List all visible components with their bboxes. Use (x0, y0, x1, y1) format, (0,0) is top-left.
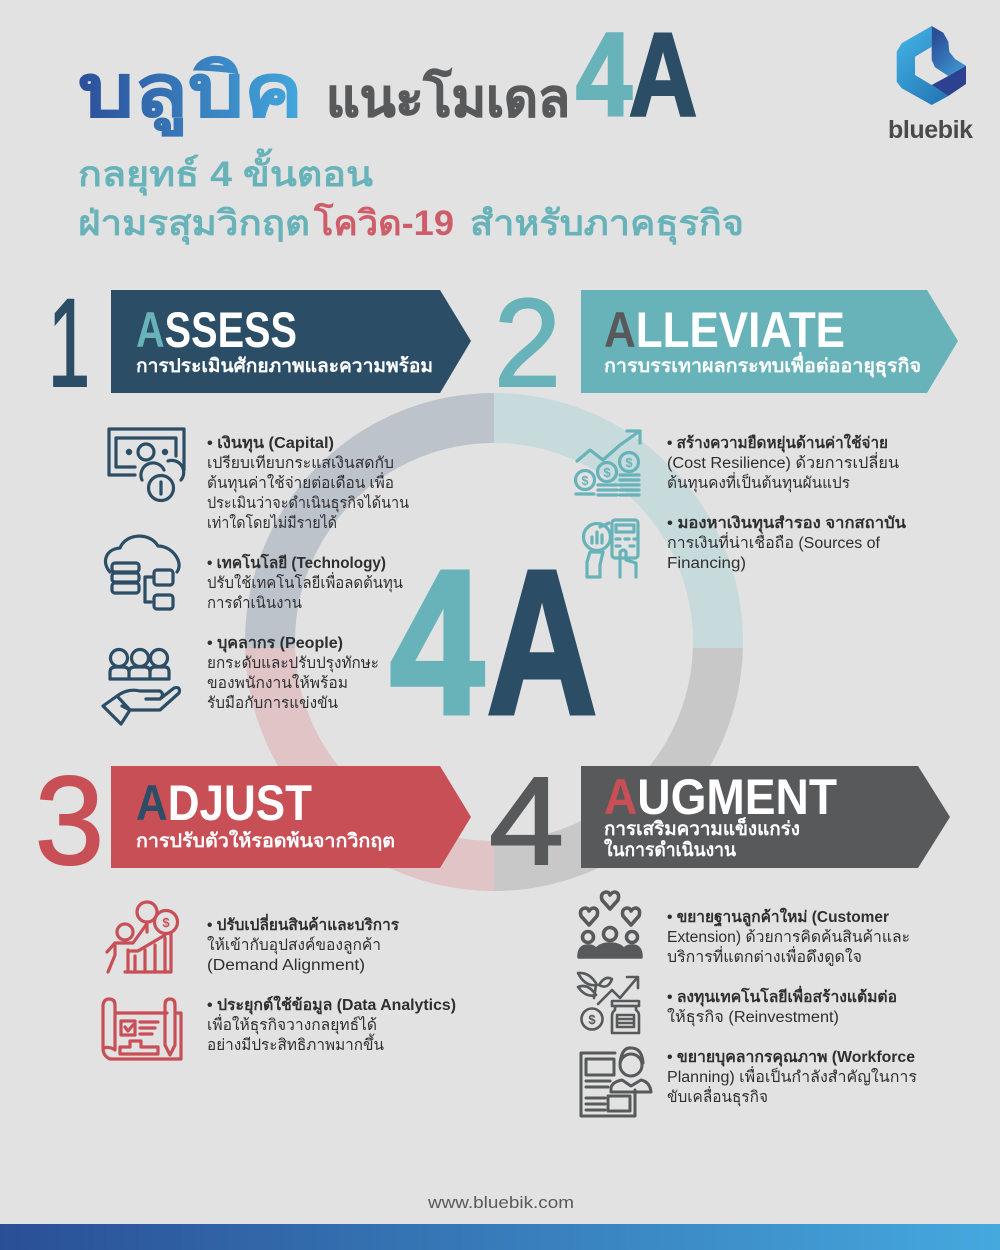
icon: plant, arrow, coin and jar (578, 973, 639, 1033)
icon: hearts and people (579, 892, 641, 957)
number 2: 2 (494, 274, 561, 413)
banner: assess (111, 290, 471, 393)
icon: cloud and servers (105, 536, 179, 609)
text: reinvestment: ให้ธุรกิจ (Reinvestment) (667, 1008, 839, 1027)
subtitle line 2 (78, 202, 744, 245)
banner: assess: การประเมินศักยภาพและความพร้อม (136, 355, 433, 377)
text: capital: ประเมินว่าจะดำเนินธุรกิจได้นาน (207, 494, 409, 513)
banner: augment: การเสริมความแข็งแกร่ง (604, 816, 800, 840)
title: suggests model: แนะโมเดล (326, 67, 570, 128)
icon: coins and growth arrow (576, 431, 640, 495)
icon: person with chart (107, 902, 178, 972)
text: workforce planning: • ขยายบุคลากรคุณภาพ (Workforce (667, 1049, 915, 1067)
subtitle line 2: สำหรับภาคธุรกิจ (470, 204, 744, 245)
panel: step 2 alleviate (494, 274, 958, 577)
icon: target and calculator (584, 520, 638, 577)
text: data analytics: • ประยุกต์ใช้ข้อมูล (Data Analytics) (207, 995, 456, 1016)
text: people: รับมือกับการแข่งขัน (207, 694, 338, 712)
text: sources of financing: การเงินที่น่าเชื่อถือ (Sources of (667, 532, 881, 552)
number 1: 1 (48, 274, 90, 413)
text: people: ยกระดับและปรับปรุงทักษะ (207, 655, 379, 673)
logo: bluebik: bluebik (888, 116, 973, 144)
center 4A: A (487, 528, 597, 757)
text: data analytics: อย่างมีประสิทธิภาพมากขึ้น (207, 1033, 384, 1054)
banner: augment: ในการดำเนินงาน (604, 838, 736, 861)
text: customer extension: Extension) ด้วยการคิดค้นสินค้าและ (667, 929, 910, 946)
text: demand alignment (207, 913, 400, 974)
subtitle line 2: ฝ่ามรสุมวิกฤต (78, 204, 310, 245)
text: capital: เปรียบเทียบกระแสเงินสดกับ (207, 455, 394, 472)
text: data analytics: เพื่อให้ธุรกิจวางกลยุทธ์ได้ (207, 1014, 377, 1035)
text: capital (207, 434, 409, 532)
text: cost resilience: (Cost Resilience) ด้วยการเปลี่ยน (667, 452, 899, 472)
text: people: • บุคลากร (People) (207, 635, 343, 653)
icon: people on hand (103, 650, 179, 724)
title: 4A: 4 (576, 9, 632, 141)
footer url: www.bluebik.com (427, 1193, 574, 1212)
text: capital: เท่าใดโดยไม่มีรายได้ (207, 514, 337, 532)
text: technology: การดำเนินงาน (207, 595, 302, 612)
icon: plant, arrow, coin and jar: $ (588, 1012, 596, 1027)
text: sources of financing: • มองหาเงินทุนสำรอง จากสถาบัน (667, 514, 906, 533)
text: reinvestment (667, 985, 897, 1027)
center 4A (390, 528, 597, 757)
center 4A: 4 (390, 528, 484, 757)
text: workforce planning: ขับเคลื่อนธุรกิจ (667, 1086, 768, 1107)
banner: adjust: ADJUST (136, 775, 312, 831)
text: customer extension (667, 907, 910, 967)
text: capital: ต้นทุนค่าใช้จ่ายต่อเดือน เพื่อ (207, 472, 394, 493)
text: sources of financing (667, 514, 906, 572)
number 4: 4 (489, 752, 564, 891)
text: people (207, 635, 379, 712)
subtitle line 1: กลยุทธ์ 4 ขั้นตอน (78, 148, 373, 196)
logo: bluebik (888, 26, 973, 144)
text: customer extension: บริการที่แตกต่างเพื่อดึงดูดใจ (667, 946, 862, 967)
text: data analytics (207, 995, 456, 1054)
panel: step 4 augment (489, 752, 950, 1116)
text: cost resilience: ต้นทุนคงที่เป็นต้นทุนผันแปร (667, 472, 850, 493)
text: capital: • เงินทุน (Capital) (207, 434, 334, 453)
banner: assess: ASSESS (136, 302, 297, 358)
banner: augment: AUGMENT (604, 769, 837, 825)
text: workforce planning (667, 1049, 917, 1107)
banner: augment (581, 766, 950, 868)
panel: step 1 assess (48, 274, 471, 724)
icon: document and person (581, 1048, 651, 1116)
text: cost resilience: • สร้างความยืดหยุ่นด้านค่าใช้จ่าย (667, 433, 888, 453)
ring chart behind the 4A (270, 418, 718, 866)
icon: coins and growth arrow: $ (581, 473, 589, 488)
icon: money and coins (109, 429, 184, 500)
banner: adjust (111, 766, 471, 868)
footer gradient bar (0, 1224, 1000, 1250)
text: people: ของพนักงานให้พร้อม (207, 674, 348, 692)
text: technology: • เทคโนโลยี (Technology) (207, 553, 386, 572)
subtitle line 2: โควิด-19 (313, 202, 454, 243)
panel: step 3 adjust (35, 752, 471, 1059)
title: bluebik: บลูบิค (78, 51, 303, 137)
banner: adjust: การปรับตัวให้รอดพ้นจากวิกฤต (136, 829, 395, 852)
title: 4A: A (629, 9, 697, 141)
text: technology: ปรับใช้เทคโนโลยีเพื่อลดต้นทุน (207, 572, 403, 593)
banner: alleviate (581, 290, 958, 393)
icon: coins and growth arrow: $ (625, 455, 633, 470)
text: technology (207, 553, 403, 612)
icon: blueprint and pencil (103, 999, 181, 1059)
title: 4A (576, 9, 697, 141)
text: demand alignment: ให้เข้ากับอุปสงค์ของลูกค้า (207, 936, 381, 955)
number 3: 3 (35, 752, 104, 891)
text: customer extension: • ขยายฐานลูกค้าใหม่ (Customer (667, 907, 889, 928)
text: demand alignment: • ปรับเปลี่ยนสินค้าและบริการ (207, 913, 400, 934)
banner: alleviate: ALLEVIATE (604, 302, 845, 358)
icon: coins and growth arrow: $ (603, 465, 611, 480)
text: reinvestment: • ลงทุนเทคโนโลยีเพื่อสร้างแต้มต่อ (667, 985, 897, 1007)
text: sources of financing: Financing) (667, 555, 746, 572)
title block (78, 9, 744, 245)
text: workforce planning: Planning) เพื่อเป็นกำลังสำคัญในการ (667, 1066, 917, 1086)
text: demand alignment: (Demand Alignment) (207, 957, 365, 974)
icon: person with chart: $ (162, 915, 170, 930)
banner: alleviate: การบรรเทาผลกระทบเพื่อต่ออายุธุรกิจ (604, 352, 921, 378)
text: cost resilience (667, 433, 899, 493)
